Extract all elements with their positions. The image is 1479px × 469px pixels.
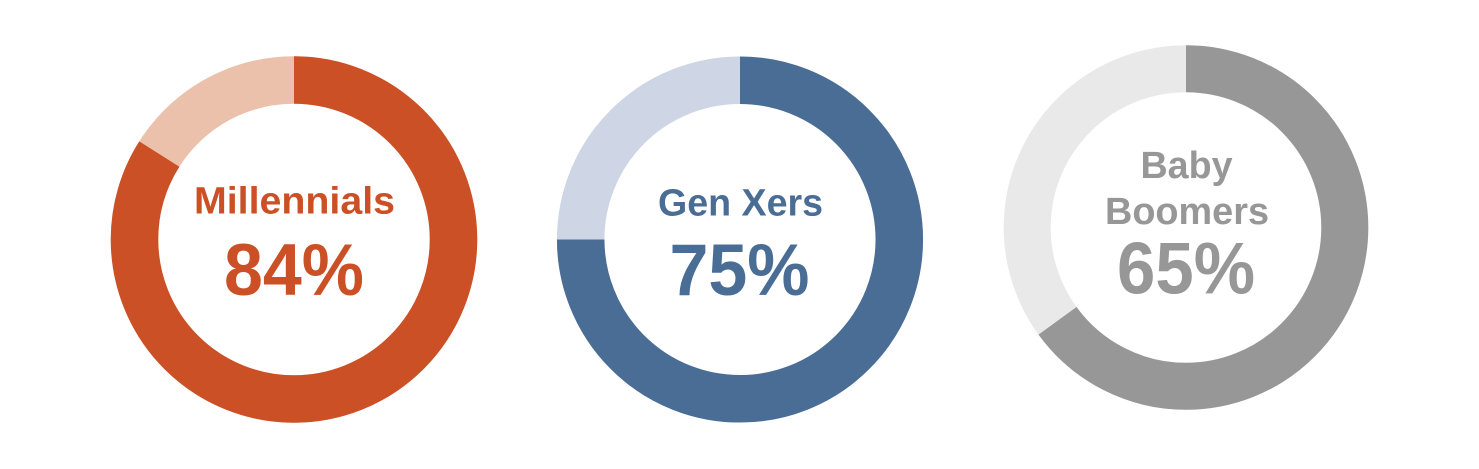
label: Gen Xers: Gen Xers: [658, 182, 823, 224]
value: 84%: 84%: [224, 230, 364, 311]
donut value: 65%: [1027, 69, 1345, 386]
donut track: remaining 35%: [1027, 69, 1345, 386]
label: Baby Boomers: Boomers: [1105, 191, 1269, 233]
donut track: remaining 25%: [581, 80, 899, 399]
label: Baby Boomers: [1105, 145, 1269, 233]
value: 65%: 65%: [1117, 228, 1255, 310]
donut value: 84%: [134, 80, 454, 399]
donut value: 75%: [581, 80, 899, 399]
value: 75%: 75%: [670, 230, 810, 311]
panel: Millennials donut: [134, 80, 454, 399]
panel: Gen Xers donut: [581, 80, 899, 399]
donut track: remaining 16%: [134, 80, 454, 399]
label: Millennials: Millennials: [194, 180, 395, 222]
panel: Baby Boomers donut: [1027, 69, 1345, 386]
label: Baby Boomers: Baby: [1140, 145, 1232, 187]
